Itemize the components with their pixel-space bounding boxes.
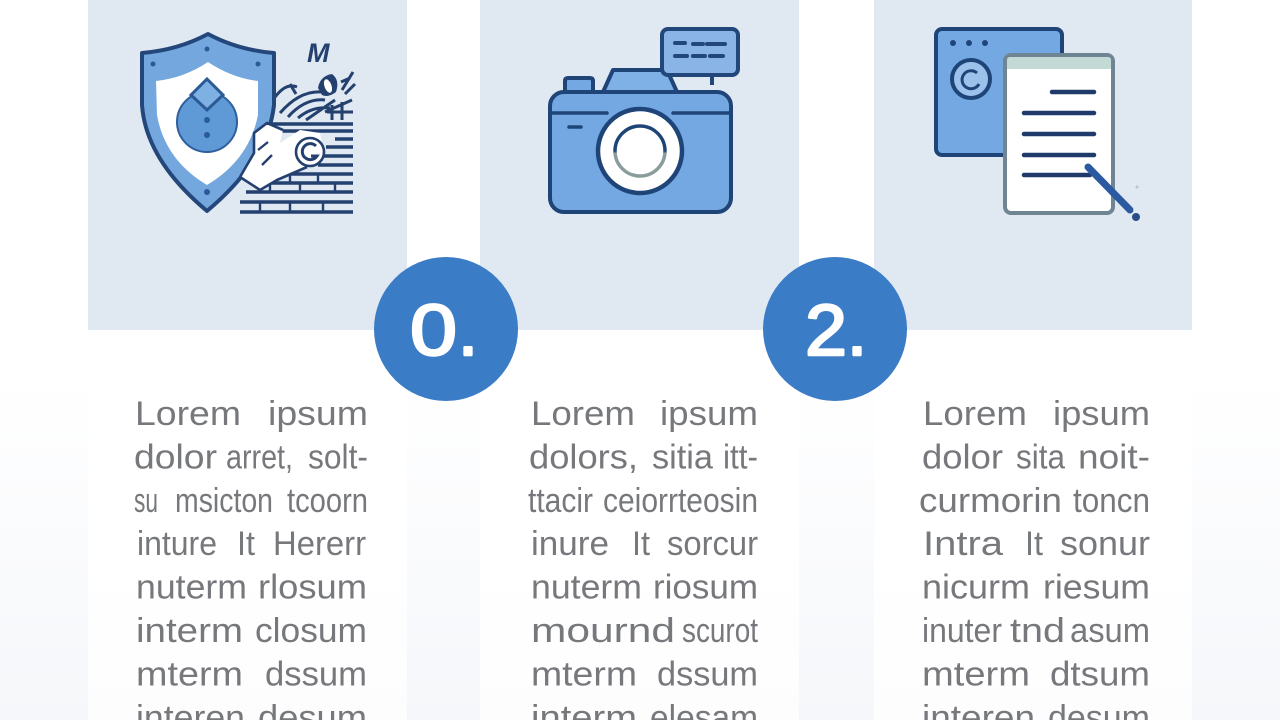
- text block: column two: mterm: [531, 656, 637, 694]
- text block: column two: dssum: [657, 656, 758, 694]
- text block: column two: Lorem: [531, 395, 635, 433]
- camera button: [565, 78, 593, 92]
- camera lens: [598, 109, 682, 193]
- text block: column one: dssum: [265, 656, 367, 694]
- icon: camera with speech bubble: [550, 29, 738, 212]
- text block: column two: itt-: [723, 438, 758, 476]
- text block: column two: nuterm: [531, 568, 642, 606]
- text block: column one: su: [134, 482, 158, 520]
- number badge: 0.: 0: [410, 291, 457, 371]
- text block: column three: curmorin: [919, 482, 1062, 520]
- text block: column one: Hererr: [273, 525, 366, 563]
- text block: column two: mournd: [531, 612, 675, 650]
- panel: column two: [480, 0, 799, 720]
- text block: column one: It: [237, 525, 256, 563]
- text block: column one: nuterm: [136, 568, 247, 606]
- text block: column one: interm: [136, 612, 243, 650]
- text block: column two: ceiorrteosin: [603, 482, 758, 520]
- text block: column three: riesum: [1043, 568, 1150, 606]
- text block: column three: sonur: [1060, 525, 1150, 563]
- text block: column three: inuter: [922, 612, 1002, 650]
- speech bubble: [662, 29, 738, 85]
- text block: column one: rlosum: [258, 568, 367, 606]
- text block: column three: toncn: [1073, 482, 1150, 520]
- text block: column one: dolor: [134, 438, 217, 476]
- text block: column two: scurot: [682, 612, 758, 650]
- number badge: 2.: .: [847, 291, 867, 371]
- panel: column three: [874, 0, 1192, 720]
- text block: column one: Lorem: [135, 395, 241, 433]
- text block: column two: ipsum: [660, 395, 758, 433]
- text block: column one: msicton: [175, 482, 273, 520]
- icon: shield with hand and bricks: [142, 34, 355, 212]
- text block: column two: sitia: [652, 438, 713, 476]
- text block: column three: Lorem: [923, 395, 1027, 433]
- text block: column three: It: [1025, 525, 1044, 563]
- brick wall lines: [240, 124, 353, 212]
- shield: [142, 34, 274, 211]
- text block: column two: inure: [531, 525, 609, 563]
- number badge: 2.: [763, 257, 907, 401]
- text block: column three: dolor: [922, 438, 1003, 476]
- pen: [1088, 167, 1140, 221]
- text block: column one: mterm: [136, 656, 243, 694]
- text block: column three: tnd: [1010, 612, 1065, 650]
- panel: column one: [88, 0, 407, 720]
- text block: column three: asum: [1070, 612, 1150, 650]
- camera body: [550, 92, 731, 212]
- text block: column one: tcoorn: [287, 482, 368, 520]
- text block: column two: ttacir: [528, 482, 593, 520]
- text block: column three: nicurm: [922, 568, 1030, 606]
- text block: column two: It: [632, 525, 651, 563]
- text block: column three: dtsum: [1050, 656, 1150, 694]
- letter mark: M: [307, 38, 330, 68]
- text block: column three: noit-: [1078, 438, 1150, 476]
- hand with spiral: [240, 123, 324, 190]
- text block: column three: [919, 395, 1150, 720]
- text block: column one: closum: [255, 612, 367, 650]
- text block: column three: mterm: [922, 656, 1030, 694]
- text block: column three: ipsum: [1053, 395, 1150, 433]
- camera top: [603, 70, 677, 92]
- text block: column one: [134, 395, 368, 720]
- text block: column one: solt-: [308, 438, 368, 476]
- icon: window and document with pen: [936, 29, 1140, 221]
- number badge: 0.: .: [458, 291, 478, 371]
- basket of leaves: [273, 72, 355, 120]
- number badge: 2.: 2: [805, 291, 847, 371]
- text block: column one: arret,: [226, 438, 293, 476]
- document: [1005, 55, 1113, 213]
- text block: column three: sita: [1016, 438, 1065, 476]
- text block: column one: ipsum: [268, 395, 368, 433]
- text block: column three: Intra: [923, 525, 1003, 563]
- text block: column two: dolors,: [529, 438, 638, 476]
- number badge: 0.: [374, 257, 518, 401]
- text block: column two: sorcur: [667, 525, 758, 563]
- text block: column two: [528, 395, 758, 720]
- text block: column two: riosum: [653, 568, 758, 606]
- back window: [936, 29, 1062, 155]
- text block: column one: inture: [137, 525, 217, 563]
